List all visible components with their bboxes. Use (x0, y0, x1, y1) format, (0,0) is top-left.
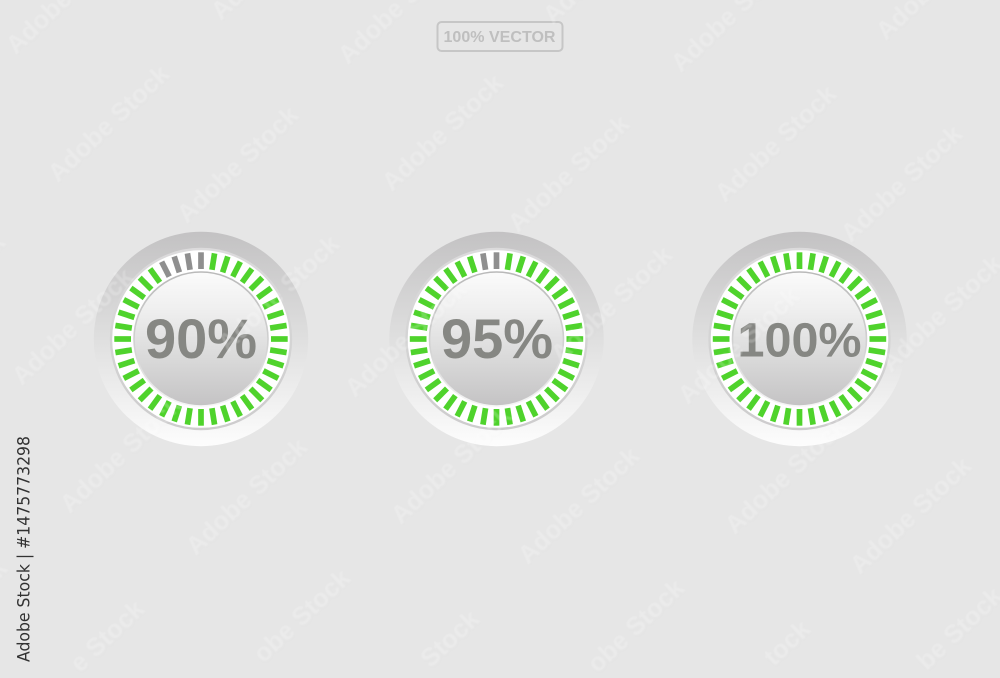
watermark pattern: Adobe Stock (377, 68, 509, 196)
watermark pattern: Adobe Stock (181, 432, 313, 560)
side credit text: Adobe Stock | #1475773298 (14, 436, 34, 662)
remaining ticks: 95 percent (455, 252, 499, 278)
dial: 90 percent (94, 232, 308, 446)
dial: 100 percent (692, 232, 907, 446)
remaining ticks: 100 percent (758, 252, 802, 278)
watermark pattern: Adobe Stock (710, 79, 842, 207)
badge: 100% vector: 100% VECTOR (444, 29, 556, 46)
watermark pattern: Adobe Stock (43, 59, 175, 187)
watermark pattern: Adobe Stock (546, 240, 678, 368)
watermark pattern: Stock (415, 604, 485, 673)
watermark pattern: tock (759, 614, 816, 671)
dial: 95 percent (389, 232, 604, 446)
watermark pattern: Adobe Stock (836, 119, 968, 247)
watermark pattern: Adobe Stock (503, 109, 635, 237)
watermark pattern: Adobe Stock (7, 262, 139, 390)
watermark pattern: obe Stock (248, 563, 356, 668)
badge: 100% vector (438, 22, 562, 51)
watermark pattern: e Stock (65, 594, 150, 678)
watermark pattern: obe Stock (582, 573, 690, 678)
watermark pattern: Adobe Stock (720, 411, 852, 539)
watermark pattern: Adobe Stock (213, 229, 345, 357)
remaining ticks: 90 percent (159, 252, 204, 278)
watermark pattern: Adobe Stock (386, 401, 518, 529)
watermark pattern: Adobe Stock (172, 100, 304, 228)
watermark pattern: Adobe Stock (340, 274, 472, 402)
watermark pattern: Adobe Stock (673, 281, 805, 409)
watermark pattern: Adobe Stock (513, 441, 645, 569)
label: 90%: 90% (145, 307, 257, 370)
watermark pattern: Adobe Stock (55, 390, 187, 518)
watermark pattern: Adobe Stock (845, 451, 977, 579)
label: 95%: 95% (441, 307, 553, 370)
label: 100%: 100% (738, 314, 862, 368)
